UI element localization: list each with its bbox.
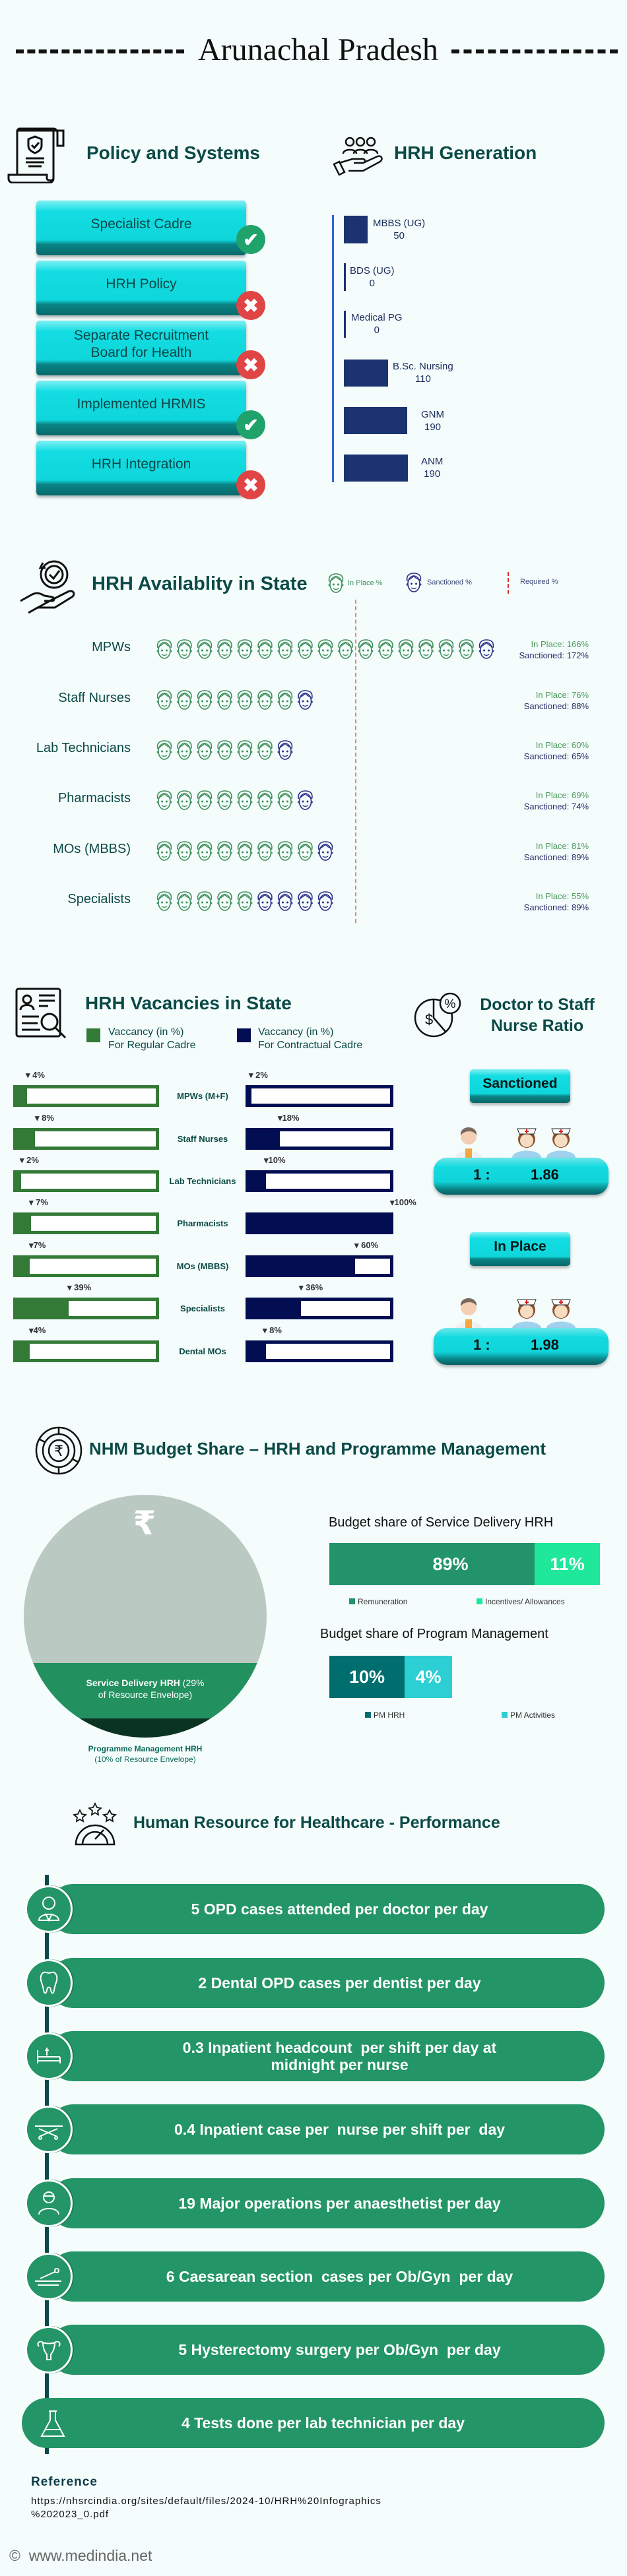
- legend: vacancy: Vaccancy (in %): [258, 1026, 333, 1038]
- pill: Hysterectomy: 5 Hysterectomy surgery per Ob/Gyn per day: [178, 2341, 501, 2358]
- pill: Inpatient headcount: [48, 2031, 605, 2081]
- pill: Hysterectomy: [48, 2325, 605, 2375]
- icon: status marks: ✔: [243, 230, 259, 249]
- row: Dental MOs: Dental MOs: [179, 1346, 226, 1356]
- chart: HRH generation bars: [332, 215, 334, 482]
- button: HRH Policy: HRH Policy: [106, 276, 177, 292]
- text: Medical PG: [351, 312, 403, 323]
- button: Sanctioned: [470, 1069, 570, 1103]
- heading: Doctor to Staff Nurse Ratio: [480, 995, 595, 1035]
- title: [16, 32, 618, 67]
- chart: service delivery HRH share: [329, 1515, 600, 1606]
- row: MPWs: MPWs: [92, 640, 131, 654]
- button: Separate Recruitment Board: [36, 321, 246, 375]
- row: Specialists: ▾ 36%: [299, 1282, 323, 1292]
- row: MOs (MBBS): ▾ 60%: [354, 1240, 378, 1250]
- row: Dental MOs: [13, 1325, 393, 1362]
- row: Staff Nurses: ▾18%: [278, 1113, 300, 1123]
- row: Lab Technicians: In Place: 60%: [536, 740, 589, 750]
- heading: HRH Generation: HRH Generation: [394, 142, 537, 163]
- legend: availability: Sanctioned %: [427, 579, 472, 586]
- text: GNM: [421, 409, 444, 420]
- chart: resource envelope pie: Service Delivery HRH (29%: [86, 1678, 205, 1688]
- legend: vacancy: Vaccancy (in %): [108, 1026, 183, 1038]
- icon: availability hand: [20, 561, 75, 613]
- row: Pharmacists: Pharmacists: [58, 791, 131, 805]
- text: 0: [370, 278, 375, 289]
- ratio bar 1.98: 1.98: [531, 1336, 559, 1353]
- footer credit: © www.medindia.net: [9, 2547, 152, 2564]
- panel: in place ratio: [432, 1232, 610, 1369]
- label: programme management HRH: Programme Management HRH: [88, 1744, 202, 1753]
- icon: bed: [25, 2032, 73, 2080]
- chart: resource envelope pie: of Resource Envelope): [98, 1689, 192, 1700]
- pill: Caesarean: 6 Caesarean section cases per Ob/Gyn per day: [166, 2268, 513, 2285]
- pill: Inpatient headcount: 0.3 Inpatient headcount per shift per day at: [183, 2039, 496, 2056]
- pill: Major operations: [48, 2178, 605, 2228]
- row: MOs (MBBS): In Place: 81%: [536, 841, 589, 851]
- chart: program management share: 10%: [349, 1667, 385, 1687]
- row: MOs (MBBS): MOs (MBBS): [177, 1261, 228, 1271]
- chart: service delivery HRH share: Remuneration: [358, 1597, 407, 1606]
- button: HRH Integration: HRH Integration: [92, 456, 191, 471]
- legend: availability: In Place %: [348, 579, 383, 587]
- ratio bar 1.86: [434, 1158, 609, 1195]
- icon: delivery bed: [25, 2253, 73, 2300]
- heading: Policy and Systems: Policy and Systems: [86, 142, 260, 163]
- heading: NHM Budget Share: NHM Budget Share – HRH and Programme Management: [89, 1439, 546, 1459]
- row: Staff Nurses: [58, 690, 589, 711]
- reference: %202023_0.pdf: [31, 2509, 109, 2520]
- icon: budget rupee: ₹: [54, 1443, 63, 1460]
- chart: resource envelope pie: [24, 1495, 267, 1738]
- pill: Inpatient headcount: midnight per nurse: [271, 2056, 409, 2073]
- row: Pharmacists: In Place: 69%: [536, 790, 589, 800]
- panel: performance list: [22, 1884, 605, 2448]
- heading: Doctor to Staff Nurse Ratio: Nurse Ratio: [491, 1017, 583, 1035]
- icon: tooth: [25, 1959, 73, 2007]
- button: Implemented HRMIS: Implemented HRMIS: [77, 396, 205, 412]
- icon: ratio percent: $: [425, 1011, 433, 1028]
- icon: uterus: [25, 2326, 73, 2373]
- row: Staff Nurses: ▾ 8%: [35, 1113, 54, 1123]
- button: In Place: [470, 1232, 570, 1266]
- row: MOs (MBBS): [53, 841, 589, 862]
- icon: performance gauge: [73, 1802, 117, 1846]
- row: Lab Technicians: ▾10%: [264, 1155, 286, 1165]
- icon: stretcher: [25, 2106, 73, 2153]
- icon: status marks: ✖: [243, 475, 259, 495]
- button: Sanctioned: Sanctioned: [482, 1075, 558, 1091]
- pill: Dental OPD: 2 Dental OPD cases per dentist per day: [198, 1974, 481, 1992]
- legend: vacancy: For Regular Cadre: [108, 1040, 195, 1051]
- icon: status marks: ✔: [243, 414, 259, 435]
- required line: [355, 600, 356, 923]
- row: MPWs (M+F): ▾ 4%: [26, 1070, 45, 1080]
- chart: availability pictogram: [36, 639, 589, 912]
- chart: program management share: PM Activities: [510, 1711, 555, 1720]
- icon: doctor and nurses: [455, 1127, 576, 1158]
- reference: https://nhsrcindia.org/sites/default/files/2024-10/HRH%20Infographics: [31, 2496, 381, 2507]
- text: BDS (UG): [350, 265, 395, 276]
- icon: vacancies document: [16, 988, 66, 1038]
- pill: Dental OPD: [48, 1958, 605, 2008]
- row: MOs (MBBS): Sanctioned: 89%: [524, 852, 589, 862]
- row: Pharmacists: Sanctioned: 74%: [524, 801, 589, 811]
- chart: service delivery HRH share: Incentives/ Allowances: [485, 1597, 565, 1606]
- legend: vacancy: For Contractual Cadre: [258, 1040, 362, 1051]
- row: Specialists: Specialists: [180, 1304, 225, 1313]
- row: Pharmacists: [13, 1197, 416, 1234]
- row: Specialists: Sanctioned: 89%: [524, 902, 589, 912]
- button: Separate Recruitment Board: Board for Health: [91, 344, 191, 360]
- row: Lab Technicians: Lab Technicians: [170, 1176, 236, 1186]
- chart: service delivery HRH share: 11%: [550, 1554, 585, 1574]
- button: Specialist Cadre: [36, 201, 246, 255]
- text: ANM: [421, 456, 443, 467]
- button: Specialist Cadre: Specialist Cadre: [91, 216, 191, 231]
- pill: OPD cases: [48, 1884, 605, 1934]
- row: Specialists: Specialists: [67, 892, 131, 906]
- heading: HRH Vacancies in State: HRH Vacancies in State: [85, 993, 292, 1013]
- text: 190: [424, 422, 441, 433]
- legend: vacancy: [86, 1026, 362, 1051]
- text: 190: [424, 468, 440, 480]
- reference: Reference: [31, 2475, 98, 2489]
- icon: HRH generation hand: [333, 137, 383, 176]
- chart: program management share: [320, 1627, 555, 1720]
- row: Staff Nurses: Staff Nurses: [178, 1134, 228, 1144]
- text: 110: [415, 373, 431, 385]
- row: Staff Nurses: Sanctioned: 88%: [524, 701, 589, 711]
- heading: Doctor to Staff Nurse Ratio: Doctor to Staff: [480, 995, 595, 1014]
- label: programme management HRH: (10% of Resource Envelope): [94, 1755, 196, 1764]
- button: Implemented HRMIS: [36, 381, 246, 435]
- panel: policy buttons: [34, 201, 248, 499]
- row: MOs (MBBS): MOs (MBBS): [53, 842, 131, 856]
- pill: OPD cases: 5 OPD cases attended per doctor per day: [191, 1901, 488, 1918]
- pill: Inpatient case: [48, 2104, 605, 2154]
- heading: HR for Healthcare - Performance: Human Resource for Healthcare - Performance: [133, 1813, 500, 1832]
- row: MPWs: In Place: 166%: [531, 639, 589, 649]
- row: MPWs (M+F): MPWs (M+F): [177, 1091, 228, 1101]
- icon: budget rupee: [36, 1426, 82, 1475]
- row: Specialists: ▾ 39%: [67, 1282, 91, 1292]
- row: MPWs: Sanctioned: 172%: [519, 650, 589, 660]
- pill: Inpatient case: 0.4 Inpatient case per nurse per shift per day: [174, 2121, 505, 2138]
- button: Separate Recruitment Board: Separate Recruitment: [74, 327, 209, 343]
- row: Pharmacists: [58, 790, 589, 811]
- icon: doctor and nurses: [455, 1298, 576, 1328]
- heading: HRH Availability in State: HRH Availablity in State: [92, 573, 308, 594]
- chart: program management share: Budget share of Program Management: [320, 1627, 548, 1641]
- chart: program management share: PM HRH: [374, 1711, 405, 1720]
- row: Specialists: [67, 891, 589, 912]
- legend: availability: Required %: [520, 578, 558, 586]
- icon: ratio percent: [414, 992, 461, 1037]
- icon: status marks: [236, 225, 265, 499]
- row: Pharmacists: ▾100%: [390, 1197, 416, 1207]
- panel: sanctioned ratio: [432, 1069, 610, 1199]
- icon: anaesthetist: [25, 2180, 73, 2227]
- pill: Tests per lab technician: [22, 2398, 605, 2448]
- chart: service delivery HRH share: 89%: [432, 1554, 469, 1574]
- text: B.Sc. Nursing: [393, 361, 453, 372]
- row: Staff Nurses: In Place: 76%: [536, 690, 589, 700]
- icon: status marks: ✖: [243, 296, 259, 315]
- reference: [31, 2475, 381, 2520]
- text: 0: [374, 325, 380, 336]
- icon: ratio percent: %: [445, 997, 456, 1011]
- row: Specialists: In Place: 55%: [536, 891, 589, 901]
- button: HRH Integration: [36, 441, 246, 495]
- text: MBBS (UG): [373, 218, 425, 229]
- chart: vacancy bars: [13, 1070, 416, 1362]
- button: In Place: In Place: [494, 1239, 546, 1253]
- ratio bar 1.86: 1.86: [531, 1166, 559, 1183]
- row: MPWs: [92, 639, 589, 660]
- text: 50: [393, 230, 405, 241]
- pill: Tests per lab technician: 4 Tests done per lab technician per day: [182, 2414, 465, 2432]
- chart: resource envelope pie: ₹: [133, 1504, 156, 1542]
- label: programme management HRH: [88, 1744, 202, 1764]
- row: Lab Technicians: [36, 740, 589, 761]
- row: MPWs (M+F): ▾ 2%: [249, 1070, 268, 1080]
- pill: Major operations: 19 Major operations per anaesthetist per day: [178, 2195, 501, 2212]
- button: HRH Policy: [36, 261, 246, 315]
- timeline line: [45, 1875, 49, 2454]
- row: MPWs (M+F): [13, 1070, 393, 1107]
- pill: Caesarean: [48, 2251, 605, 2302]
- title: Arunachal Pradesh: [198, 32, 438, 67]
- ratio bar 1.98: [434, 1328, 609, 1365]
- row: Dental MOs: ▾ 8%: [263, 1325, 282, 1335]
- row: Dental MOs: ▾4%: [29, 1325, 46, 1335]
- ratio bar 1.86: 1 :: [473, 1166, 490, 1183]
- icon: doctor: [25, 1885, 73, 1933]
- row: Pharmacists: Pharmacists: [177, 1218, 228, 1228]
- row: Specialists: [13, 1282, 393, 1319]
- ratio bar 1.98: 1 :: [473, 1336, 490, 1353]
- row: Staff Nurses: Staff Nurses: [58, 691, 131, 705]
- icon: policy scroll: [8, 128, 65, 183]
- chart: program management share: 4%: [415, 1667, 442, 1687]
- chart: service delivery HRH share: Budget share of Service Delivery HRH: [329, 1515, 553, 1530]
- legend: availability: [328, 572, 558, 594]
- row: Lab Technicians: Sanctioned: 65%: [524, 751, 589, 761]
- row: MOs (MBBS): ▾7%: [29, 1240, 46, 1250]
- row: Staff Nurses: [13, 1113, 393, 1150]
- row: Lab Technicians: ▾ 2%: [20, 1155, 39, 1165]
- row: Lab Technicians: [13, 1155, 393, 1192]
- row: MOs (MBBS): [13, 1240, 393, 1277]
- row: Pharmacists: ▾ 7%: [29, 1197, 48, 1207]
- icon: status marks: ✖: [243, 355, 259, 375]
- row: Lab Technicians: Lab Technicians: [36, 741, 131, 755]
- icon: flask: [40, 2410, 65, 2437]
